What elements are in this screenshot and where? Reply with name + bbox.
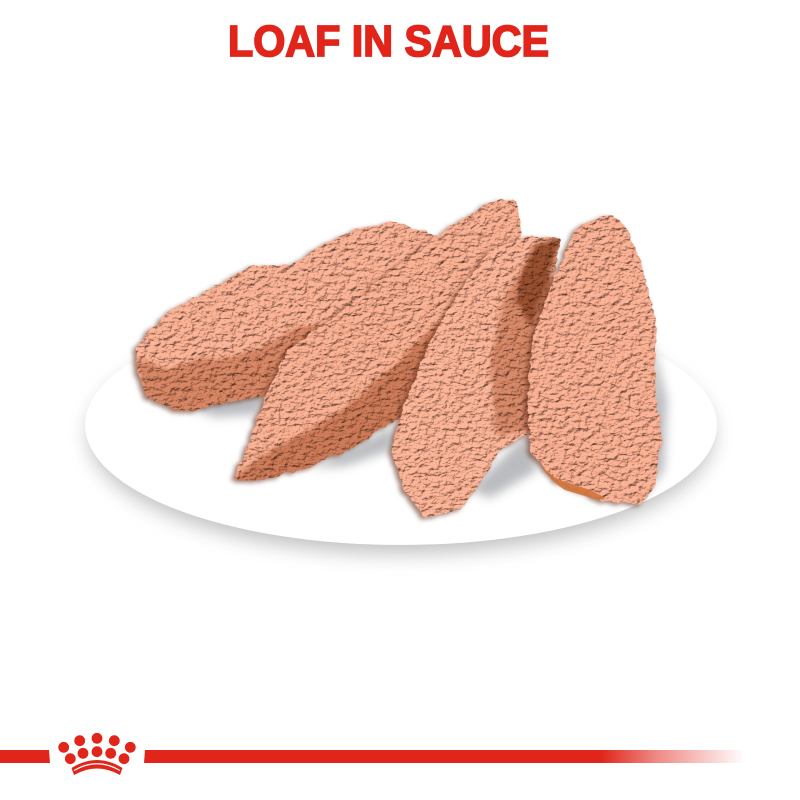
footer red line left: [0, 750, 50, 763]
plate shadow: [89, 317, 713, 553]
footer red line fading right: [144, 750, 745, 763]
slice 3 shaded side: [490, 246, 552, 436]
plate with food photo: [85, 199, 717, 553]
loaf slice 3: [391, 236, 560, 518]
slice 3 dark inner crease: [516, 238, 560, 325]
loaf slice 2: [234, 199, 522, 482]
loaf slice 4: [527, 213, 662, 506]
shadows cast by the loaf slices: [190, 340, 667, 498]
orange sauce edge on slice 4: [540, 464, 606, 500]
white plate: [85, 305, 717, 545]
slice 1 cut face: [136, 325, 345, 411]
title: LOAF IN SAUCE: [228, 17, 549, 66]
icon: royal crown logo: [58, 733, 136, 775]
slice 2 cut face: [234, 320, 440, 482]
loaf slice 1: [136, 222, 440, 411]
